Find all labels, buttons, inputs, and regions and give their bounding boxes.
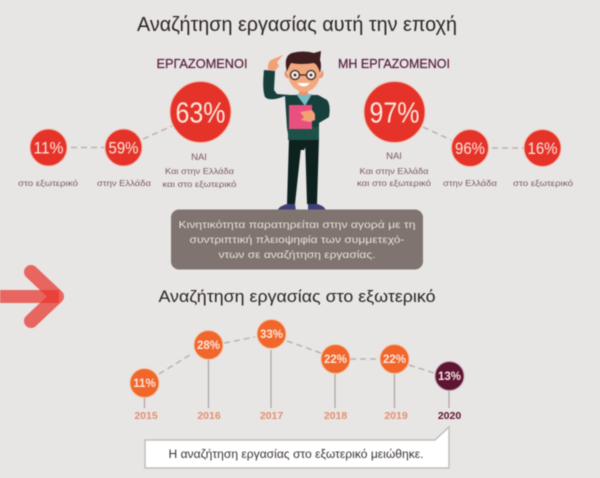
label: both, employed [162,166,237,189]
ears [285,70,323,78]
summary text: Κινητικότητα παρατηρείται στην αγορά με τη [178,219,416,231]
callout: Η αναζήτηση εργασίας στο εξωτερικό μειώθηκε. [168,449,424,461]
stat: 11 percent: 11% [34,138,64,158]
label: both, unemployed: Και στην Ελλάδα [360,166,429,176]
pink book [289,105,312,129]
point: 2019: 2019 [384,410,408,422]
label: in Greece, employed: στην Ελλάδα [97,178,151,188]
label: abroad, unemployed: στο εξωτερικό [513,178,573,188]
icon: red arrow [0,272,59,321]
point: 2019 [380,344,409,422]
stat: 63 percent [170,82,231,142]
point: 2017: 2017 [260,410,283,422]
stat: 96 percent [452,130,488,166]
line chart: job search abroad by year [130,320,464,422]
point: 2015 [130,368,159,422]
callout [145,427,449,468]
legs [287,138,319,204]
raised hand [268,55,283,71]
point: 2015: 2015 [134,410,158,422]
hair [286,51,321,73]
eyes [294,74,312,76]
smile [297,83,310,86]
point: 2016: 28% [197,340,220,352]
stat: 59 percent: 59% [108,138,138,158]
point: 2017 [257,320,286,422]
heading: unemployed: ΜΗ ΕΡΓΑΖΟΜΕΝΟΙ [338,56,450,71]
stat: 16 percent [524,130,561,166]
label: both, unemployed [357,166,431,188]
label: both, employed: Και στην Ελλάδα [165,166,234,176]
shirt [296,94,312,106]
heading: job search abroad: Αναζήτηση εργασίας στο εξωτερικό [158,287,436,306]
stat: 97 percent: 97% [370,98,420,130]
summary text: συντριπτική πλειοψηφία των συμμετεχό- [190,234,405,246]
label: yes, employed: ΝΑΙ [191,152,207,163]
label: both, unemployed: και στο εξωτερικό [357,178,431,188]
heading: employed: ΕΡΓΑΖΟΜΕΝΟΙ [156,56,248,71]
label: both, employed: και στο εξωτερικό [162,179,237,189]
point: 2015: 11% [133,378,156,390]
point: 2018 [321,344,350,422]
title: Αναζήτηση εργασίας αυτή την εποχή [137,14,457,36]
icon: man with glasses holding a pink book [263,51,330,211]
stat: 59 percent [105,129,142,166]
stat: 63 percent: 63% [176,98,226,130]
point: 2018: 22% [324,354,347,366]
panel: gray summary box [171,210,423,270]
point: 2020: 2020 [438,410,461,422]
jacket [263,70,330,140]
shoes [277,204,326,211]
summary text [178,219,416,261]
summary text: ντων σε αναζήτηση εργασίας. [218,249,376,261]
glasses [290,70,316,80]
point: 2016 [194,330,223,422]
point: 2016: 2016 [197,410,221,422]
stat: 11 percent [30,129,67,166]
stat: 96 percent: 96% [455,139,485,158]
point: 2018: 2018 [324,410,347,422]
head [288,54,320,92]
stat: 16 percent: 16% [528,139,558,158]
neck [299,87,308,95]
point: 2020: 13% [438,371,461,383]
panel: employed stats [18,82,237,189]
stat: 97 percent [364,82,425,142]
label: yes, unemployed: ΝΑΙ [386,151,402,162]
hand on book [300,110,315,122]
panel: unemployed stats [357,82,573,188]
label: in Greece, unemployed: στην Ελλάδα [443,178,497,188]
point: 2020 [435,362,464,422]
label: abroad, employed: στο εξωτερικό [18,178,78,188]
point: 2019: 22% [383,354,406,366]
point: 2017: 33% [260,329,283,341]
